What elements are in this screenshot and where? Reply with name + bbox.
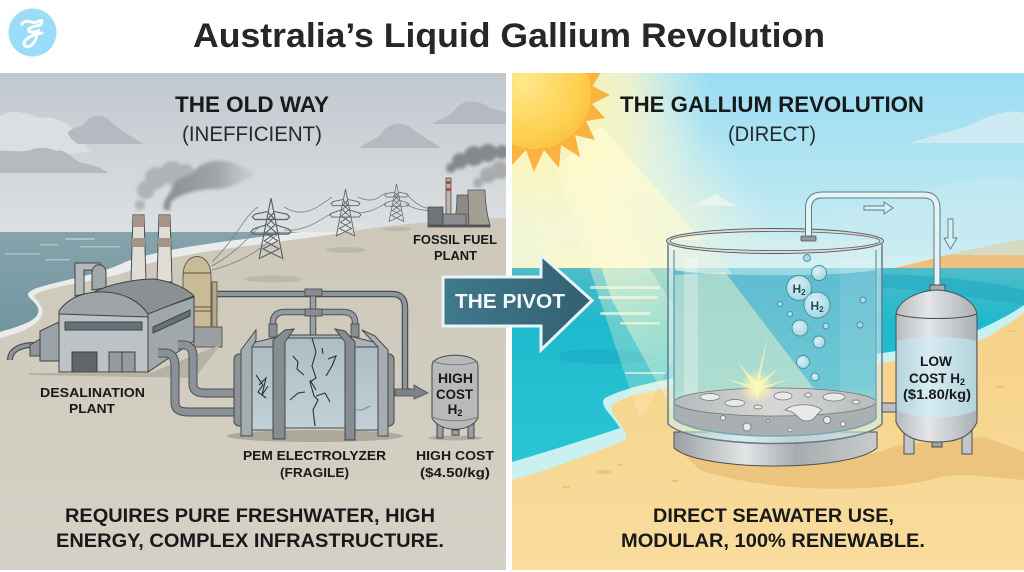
doors xyxy=(72,352,97,372)
transfer pipe xyxy=(808,195,937,288)
smoke from fossil plant xyxy=(446,144,509,188)
pylon 3 xyxy=(384,184,409,222)
bubble labels: 2 xyxy=(801,288,806,297)
sun xyxy=(470,37,610,172)
heading: the gallium revolution: THE GALLIUM REVOLUTION xyxy=(620,92,924,117)
clouds xyxy=(688,112,1024,255)
rim xyxy=(668,230,882,252)
fossil fuel plant xyxy=(428,178,490,227)
arrow: the pivot: THE PIVOT xyxy=(455,291,565,313)
heading: the old way: THE OLD WAY xyxy=(175,92,329,117)
logo badge xyxy=(8,8,56,56)
label: PEM electrolyzer xyxy=(243,448,387,480)
low cost storage tank xyxy=(896,285,977,454)
hydrogen bubbles xyxy=(778,254,866,381)
label: high cost price: ($4.50/kg) xyxy=(420,465,490,480)
pylon 1 xyxy=(251,198,291,260)
PEM electrolyzer xyxy=(234,329,394,440)
bubble labels: H xyxy=(810,299,819,313)
output arrow xyxy=(395,385,428,399)
label: high cost tank text xyxy=(436,374,473,416)
cracks xyxy=(256,338,370,426)
label: PEM electrolyzer: PEM ELECTROLYZER xyxy=(243,448,387,463)
summary: old way: REQUIRES PURE FRESHWATER, HIGH xyxy=(65,506,435,527)
subheading: direct: (DIRECT) xyxy=(728,123,816,146)
label: fossil fuel plant: FOSSIL FUEL xyxy=(413,233,497,247)
sea shading xyxy=(560,274,1024,364)
smoke from desalination chimneys xyxy=(135,161,255,210)
upper hydrogen pipe xyxy=(217,292,412,393)
label: high cost price: HIGH COST xyxy=(416,448,494,463)
pylon shadows xyxy=(244,227,411,282)
beach foam xyxy=(0,232,346,338)
foam xyxy=(512,305,1024,490)
label: fossil fuel plant xyxy=(413,233,497,263)
label: low cost tank: 2 xyxy=(960,377,965,387)
beige tower xyxy=(183,256,222,347)
bubble labels: H xyxy=(792,282,801,296)
sun beams xyxy=(555,125,830,420)
panel: the old way xyxy=(0,73,509,570)
label: low cost tank: COST H xyxy=(909,371,960,386)
sun glow xyxy=(512,73,812,273)
summary: gallium revolution: DIRECT SEAWATER USE, xyxy=(653,506,894,527)
sea xyxy=(512,268,1024,488)
clamps xyxy=(273,329,294,439)
top face xyxy=(253,334,376,346)
horizon glow xyxy=(512,73,862,273)
sand xyxy=(0,218,506,570)
bubble labels: 2 xyxy=(819,305,824,314)
arrow: the pivot xyxy=(443,255,592,350)
label: desalination plant: DESALINATION xyxy=(40,385,145,400)
windows xyxy=(65,322,142,330)
pipe fittings xyxy=(269,289,359,337)
label: high cost price xyxy=(416,448,494,480)
sand xyxy=(512,313,1024,570)
tank outline xyxy=(668,240,882,444)
label: low cost tank: ($1.80/kg) xyxy=(903,387,971,402)
intake pipes xyxy=(10,322,59,361)
flow arrow right xyxy=(864,202,893,214)
label: high cost tank text: H xyxy=(448,402,457,417)
desalination plant xyxy=(10,279,194,372)
high cost tank xyxy=(428,355,482,440)
electrolyzer shadow xyxy=(227,430,403,442)
sea highlights xyxy=(5,238,120,260)
sand speckles xyxy=(562,330,1016,488)
sand shadow xyxy=(680,437,1024,489)
glass reactor tank xyxy=(666,228,884,444)
light spark xyxy=(725,335,792,404)
label: high cost tank text: HIGH xyxy=(438,371,473,386)
light through water xyxy=(675,272,815,400)
end caps xyxy=(234,354,240,426)
subheading: inefficient: (INEFFICIENT) xyxy=(182,123,322,146)
sea xyxy=(0,232,300,332)
summary: old way: ENERGY, COMPLEX INFRASTRUCTURE. xyxy=(56,531,444,552)
side wall xyxy=(148,297,194,372)
pylon 2 xyxy=(330,189,361,237)
sky xyxy=(512,73,1024,273)
label: fossil fuel plant: PLANT xyxy=(434,249,477,263)
roof xyxy=(94,279,194,314)
chimneys xyxy=(131,215,172,282)
tank connector xyxy=(882,403,900,412)
front wall xyxy=(59,313,148,372)
summary: old way xyxy=(56,506,444,552)
label: high cost tank text: COST xyxy=(436,387,474,402)
flow arrow down xyxy=(944,219,957,249)
inlet pipes xyxy=(158,345,236,412)
bubble labels xyxy=(792,282,824,314)
label: PEM electrolyzer: (FRAGILE) xyxy=(280,465,349,480)
gallium pool xyxy=(674,388,876,436)
outer frames xyxy=(241,330,256,436)
label: low cost tank: LOW xyxy=(920,354,952,369)
small process tank xyxy=(75,263,106,296)
building shadow xyxy=(28,344,222,378)
sea highlights xyxy=(590,286,665,374)
membrane panels xyxy=(252,347,273,430)
sky xyxy=(0,73,506,243)
panel: the gallium revolution xyxy=(470,37,1024,570)
title: Australia’s Liquid Gallium Revolution xyxy=(193,17,825,55)
transmission wires xyxy=(212,193,430,270)
label: desalination plant xyxy=(40,385,145,416)
clouds xyxy=(0,101,506,173)
pipe flange xyxy=(801,236,816,241)
base of reactor xyxy=(674,432,877,466)
summary: gallium revolution: MODULAR, 100% RENEWABLE. xyxy=(621,531,925,552)
water xyxy=(674,270,876,437)
label: low cost tank xyxy=(903,354,971,402)
label: high cost tank text: 2 xyxy=(457,408,462,418)
summary: gallium revolution xyxy=(621,506,925,552)
distant headland xyxy=(893,239,1024,270)
glass body xyxy=(668,240,882,444)
label: desalination plant: PLANT xyxy=(69,401,115,416)
